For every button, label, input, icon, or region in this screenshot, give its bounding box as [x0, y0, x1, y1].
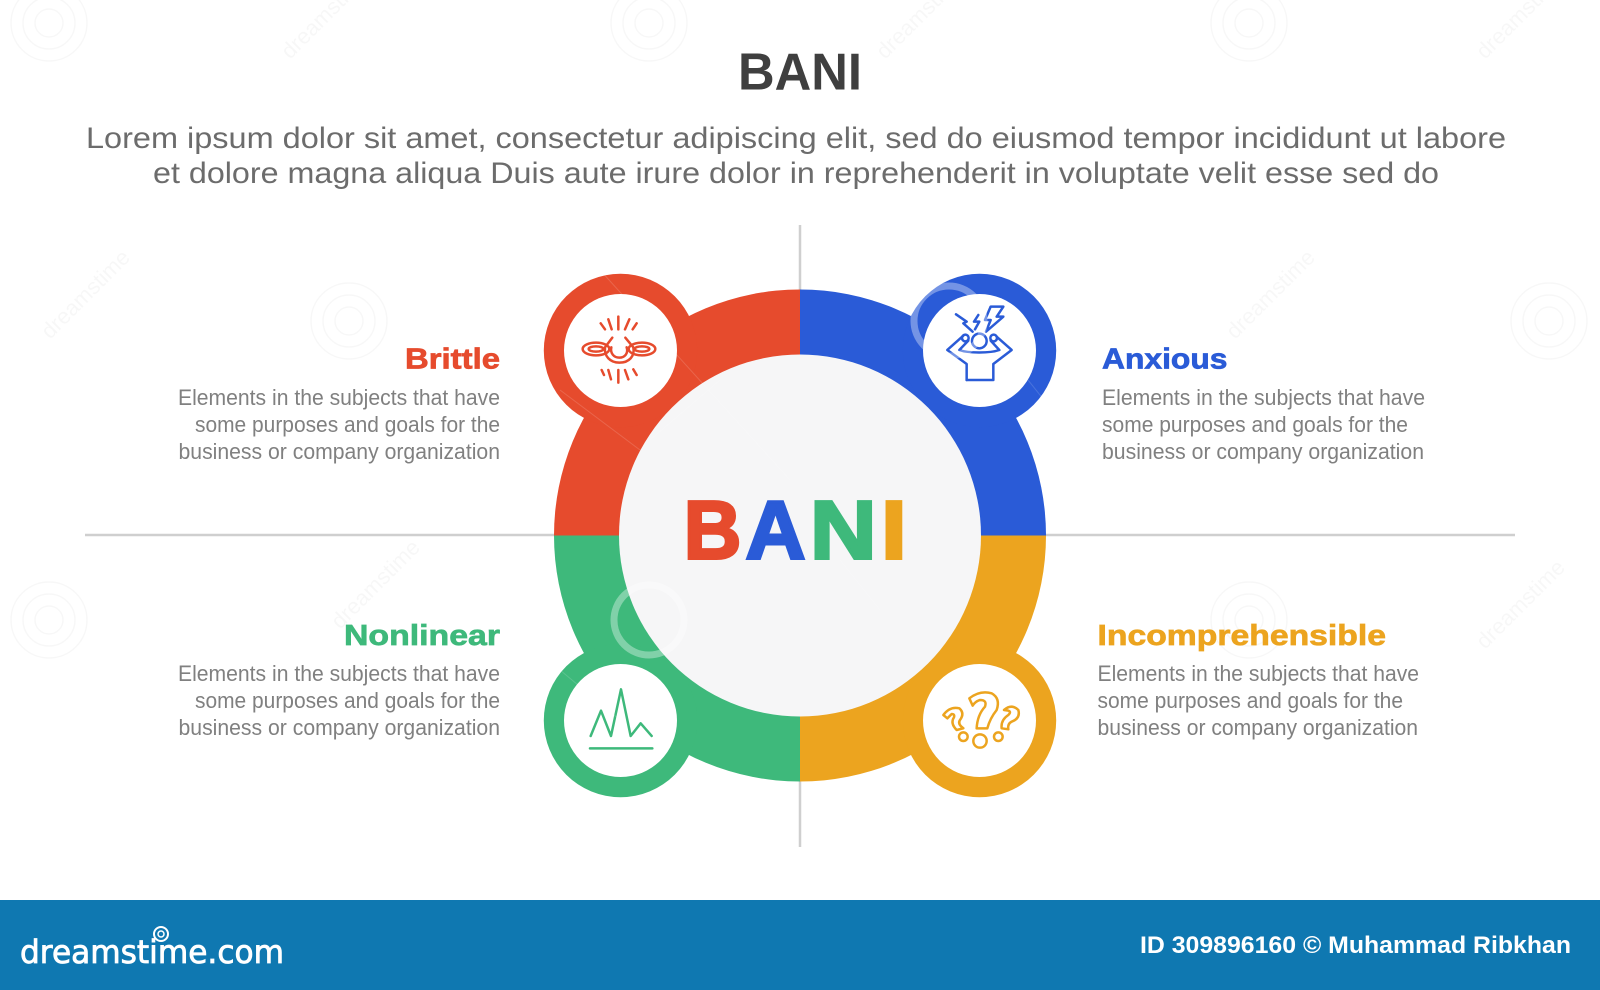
icon: nonlinear line chart — [590, 689, 652, 748]
node: nonlinear — [544, 644, 697, 797]
ring segment: nonlinear — [554, 536, 800, 782]
central ring diagram — [544, 274, 1056, 797]
watermark overlay — [560, 270, 1060, 720]
node: incomprehensible — [903, 644, 1056, 797]
watermark pattern: dreamstime — [36, 245, 135, 344]
footer credit: ID 309896160 © Muhammad Ribkhan — [1140, 932, 1571, 959]
text block: Nonlinear — [178, 620, 500, 740]
centre label BANI: B — [684, 484, 741, 576]
centre label BANI: A — [746, 484, 806, 576]
subtitle text — [86, 122, 1506, 190]
footer logo: dreamstime.com — [20, 933, 284, 971]
centre label BANI — [684, 484, 907, 576]
text block: Nonlinear: Elements in the subjects that have — [178, 661, 500, 686]
quadrant divider lines — [85, 225, 1515, 847]
text block: Anxious: some purposes and goals for the — [1102, 412, 1408, 437]
text block: Anxious: Anxious — [1102, 344, 1228, 376]
watermark pattern: dreamstime — [1221, 245, 1320, 344]
ring segment: anxious — [800, 290, 1046, 536]
text block: Anxious: business or company organization — [1102, 439, 1424, 464]
subtitle text: Lorem ipsum dolor sit amet, consectetur adipiscing elit, sed do eiusmod tempor incididunt ut labore — [86, 122, 1506, 155]
centre disc — [619, 354, 981, 716]
text block: Incomprehensible: some purposes and goals for the — [1098, 688, 1403, 713]
text block: Brittle: business or company organization — [178, 439, 500, 464]
node: anxious — [903, 274, 1056, 427]
icon: anxious person — [947, 307, 1012, 380]
text block: Incomprehensible: Elements in the subjects that have — [1098, 661, 1419, 686]
ring segment: brittle — [554, 290, 800, 536]
icon disc: brittle — [564, 294, 677, 407]
text block: Nonlinear: business or company organization — [178, 715, 500, 740]
text block: Incomprehensible: business or company organization — [1098, 715, 1418, 740]
centre label BANI: I — [881, 484, 907, 576]
text block: Brittle: Brittle — [405, 344, 500, 376]
text block: Brittle: some purposes and goals for the — [195, 412, 500, 437]
centre label BANI: N — [810, 484, 877, 576]
ring segment: incomprehensible — [800, 536, 1046, 782]
icon disc: incomprehensible — [923, 664, 1036, 777]
text block: Nonlinear: some purposes and goals for the — [195, 688, 500, 713]
watermark pattern: dreamstime — [1471, 555, 1570, 654]
text block: Brittle: Elements in the subjects that have — [178, 385, 500, 410]
watermark pattern — [11, 0, 1587, 658]
subtitle text: et dolore magna aliqua Duis aute irure dolor in reprehenderit in voluptate velit esse sed do — [153, 157, 1439, 190]
text block: Brittle — [178, 344, 500, 464]
text block: Anxious — [1102, 344, 1425, 464]
title: BANI — [738, 44, 862, 102]
icon disc: anxious — [923, 294, 1036, 407]
icon: broken chain — [583, 317, 655, 383]
watermark pattern: dreamstime — [326, 535, 425, 634]
text block: Anxious: Elements in the subjects that have — [1102, 385, 1425, 410]
icon disc: nonlinear — [564, 664, 677, 777]
node: brittle — [544, 274, 697, 427]
text block: Incomprehensible: Incomprehensible — [1098, 620, 1386, 652]
icon: question marks — [943, 692, 1019, 748]
text block: Incomprehensible — [1098, 620, 1419, 740]
text block: Nonlinear: Nonlinear — [344, 620, 500, 652]
footer bar — [0, 900, 1600, 990]
